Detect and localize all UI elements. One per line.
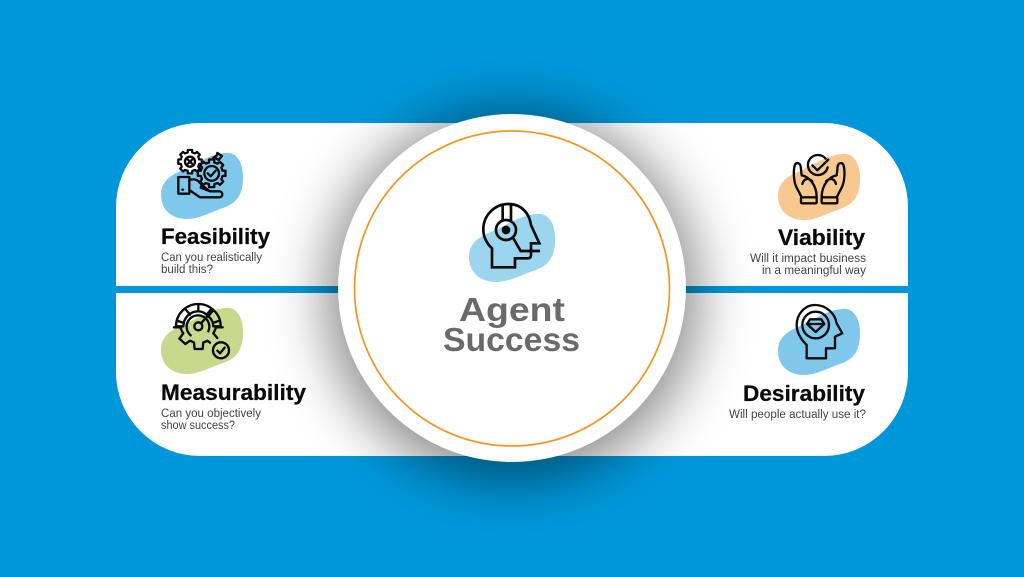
heading: Desirability (743, 381, 866, 406)
description: in a meaningful way (762, 265, 866, 277)
title line two: Success (443, 322, 580, 359)
description: Will it impact business (750, 253, 866, 265)
icon: agent head with headset (469, 204, 555, 282)
panel: Viability (750, 154, 866, 277)
heading: Feasibility (161, 224, 271, 249)
panel: Desirability (729, 305, 866, 421)
description: Will people actually use it? (729, 409, 866, 421)
horizontal divider band (116, 286, 908, 293)
panel: Feasibility (161, 150, 271, 276)
icon: head with diamond (778, 305, 860, 375)
circle drop shadow (326, 110, 698, 482)
icon: gauge gear with check (161, 304, 243, 374)
center circle (338, 114, 686, 462)
title: Agent (459, 292, 565, 329)
icon: gears on hand (161, 150, 243, 219)
description: Can you realistically (161, 252, 262, 264)
icon: hands holding check (778, 154, 860, 220)
heading: Viability (778, 225, 866, 250)
description: build this? (161, 264, 213, 276)
description: Can you objectively (161, 408, 261, 420)
white rounded panel (116, 123, 908, 456)
panel: Measurability (161, 304, 307, 432)
center content: Agent Success (443, 204, 580, 359)
heading: Measurability (161, 380, 307, 405)
description: show success? (161, 420, 235, 432)
